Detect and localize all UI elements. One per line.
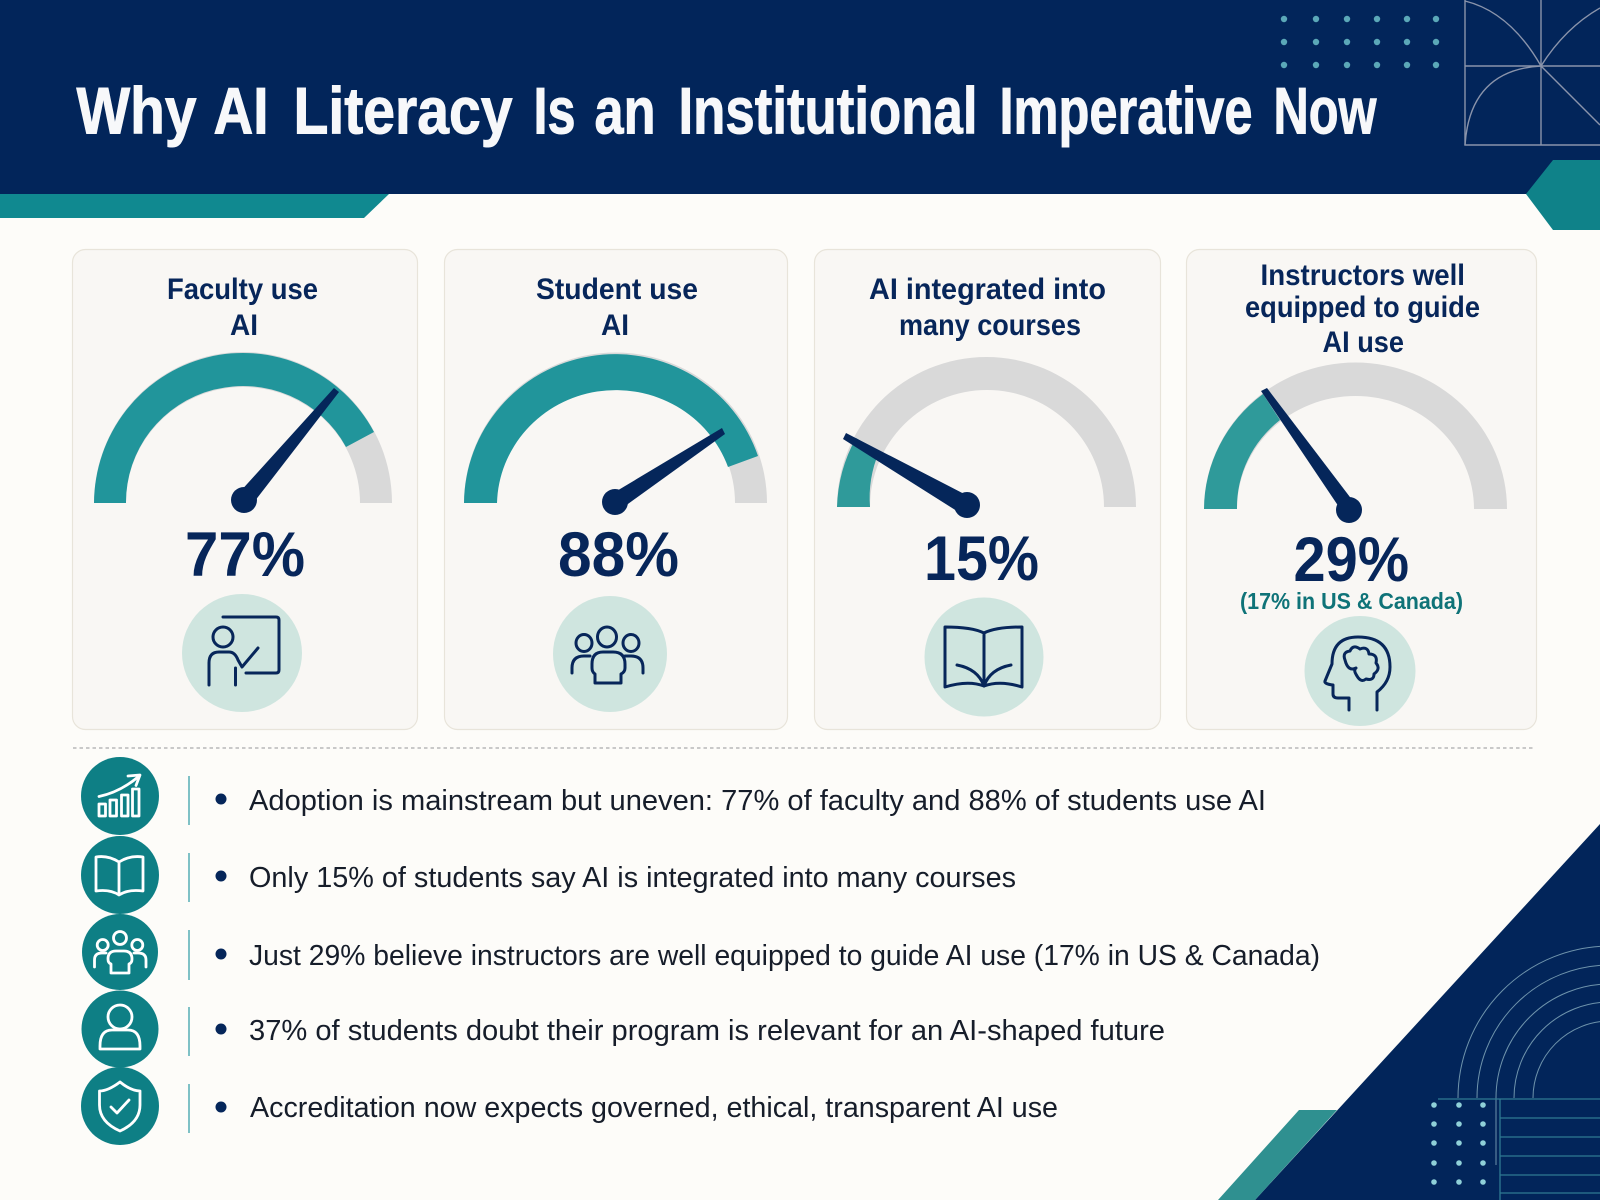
heading: instructors well equipped: Instructors well	[1260, 259, 1465, 292]
heading: student use AI	[536, 273, 698, 342]
value: 88%: 88%	[558, 520, 679, 590]
heading: faculty use AI: Faculty use	[167, 273, 318, 306]
list row: integration: Only 15% of students say AI is integrated into many courses	[249, 862, 1016, 894]
heading: AI integrated	[869, 273, 1106, 342]
value: 15%: 15%	[924, 524, 1039, 594]
list row: relevance: 37% of students doubt their program is relevant for an AI-shaped future	[249, 1015, 1165, 1047]
heading: faculty use AI: AI	[230, 309, 258, 342]
heading: instructors well equipped: AI use	[1322, 326, 1404, 359]
icon: person	[82, 990, 158, 1068]
list row: adoption	[81, 757, 1266, 835]
gauge: 29%	[1204, 363, 1507, 523]
gauge: 77%	[94, 352, 392, 513]
icon: people	[82, 914, 158, 990]
panel: faculty use AI	[72, 250, 418, 730]
heading: AI integrated: AI integrated into	[869, 273, 1106, 306]
list row: accreditation	[81, 1067, 1058, 1145]
list row: adoption: Adoption is mainstream but uneven: 77% of faculty and 88% of students use AI	[249, 785, 1266, 817]
list row: accreditation: Accreditation now expects governed, ethical, transparent AI use	[250, 1092, 1058, 1124]
heading: AI integrated: many courses	[899, 309, 1081, 342]
panel: AI integrated into many courses	[814, 250, 1160, 730]
icon: open book	[924, 598, 1044, 716]
title: AI	[214, 74, 268, 148]
heading: student use AI: AI	[601, 309, 629, 342]
heading: faculty use AI	[167, 273, 318, 342]
icon: book	[81, 836, 159, 914]
icon: group of students	[553, 596, 667, 712]
list row: integration	[81, 836, 1016, 914]
heading: instructors well equipped: equipped to guide	[1245, 291, 1480, 324]
list row: relevance	[82, 990, 1165, 1068]
header band	[0, 0, 1600, 230]
title: Is	[534, 74, 576, 148]
divider	[73, 747, 1535, 749]
icon: teacher at board	[182, 594, 302, 712]
gauge: 15%	[837, 357, 1136, 518]
panel: instructors well equipped	[1186, 250, 1536, 730]
icon: head with brain	[1304, 616, 1416, 726]
title	[76, 74, 1377, 148]
panel: student use AI	[444, 250, 788, 730]
value: 77%: 77%	[185, 520, 305, 590]
title: Institutional	[678, 74, 978, 148]
corner decoration	[1218, 824, 1600, 1200]
title: Now	[1274, 74, 1377, 148]
icon: rising bar chart	[81, 757, 159, 835]
title: Why	[76, 74, 197, 148]
title: an	[594, 74, 656, 148]
title: Literacy	[294, 74, 513, 148]
value: 29%: 29%	[1294, 525, 1409, 595]
icon: shield with check	[81, 1067, 159, 1145]
sub-value: 17% in US and Canada: (17% in US & Canada)	[1240, 588, 1463, 614]
list row: instructors: Just 29% believe instructors are well equipped to guide AI use (17% in US & Canada)	[249, 940, 1320, 972]
gauge: 88%	[464, 353, 767, 515]
heading: student use AI: Student use	[536, 273, 698, 306]
heading: instructors well equipped	[1245, 259, 1480, 359]
list row: instructors	[82, 914, 1320, 990]
title: Imperative	[1000, 74, 1252, 148]
